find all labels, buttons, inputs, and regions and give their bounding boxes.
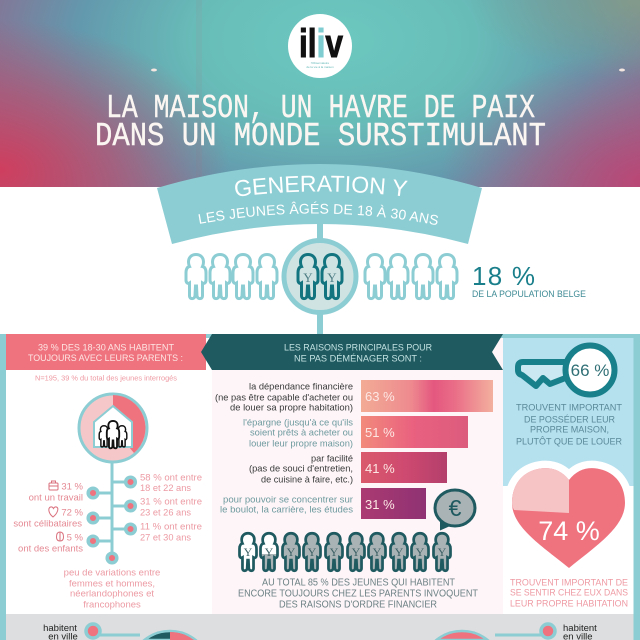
statistic: 18 %: DE LA POPULATION BELGE (472, 289, 586, 300)
people row: 85 %: Y (308, 545, 317, 559)
title (95, 90, 546, 155)
reason labels: soient prêts à acheter ou (250, 427, 353, 438)
age breakdown text: 23 et 26 ans (140, 508, 191, 518)
situation text with icons (13, 481, 84, 554)
situation text with icons: sont célibataires (13, 518, 82, 530)
people row: 85 %: Y (438, 545, 447, 559)
ribbon: Generation Y (157, 164, 482, 334)
bar chart: reasons: 31 % (365, 497, 395, 512)
reason labels: (pas de souci d'entretien, (249, 463, 353, 474)
people row: 85 %: Y (395, 545, 404, 559)
note: variations: peu de variations entre (64, 568, 160, 578)
heart chart 74 % (512, 468, 625, 568)
logo: iliv: l'Observatoire (311, 61, 330, 65)
text: 66 % caption: TROUVENT IMPORTANT (516, 402, 622, 413)
text: 66 % caption: PROPRE MAISON, (530, 424, 609, 435)
heading: pink: 39 % DES 18-30 ANS HABITENT (38, 342, 174, 354)
people row: 85 % (240, 533, 450, 571)
reason labels: la dépendance financière (249, 381, 353, 392)
icon: key 66 % (518, 346, 614, 394)
donut chart with house icon (79, 394, 147, 462)
bar chart: reasons: 63 % (365, 389, 395, 404)
header textured gradient banner (0, 0, 640, 187)
reason labels: (ne pas être capable d'acheter ou (215, 392, 353, 403)
reason labels: pour pouvoir se concentrer sur (223, 494, 353, 505)
note: variations: femmes et hommes, (69, 578, 155, 590)
icon: key 66 %: 66 % (571, 361, 609, 380)
note: variations: néerlandophones et (70, 588, 154, 600)
note: variations (64, 568, 160, 610)
reason labels: de louer sa propre habitation) (230, 402, 353, 413)
logo: iliv: iliv (299, 22, 344, 66)
logo: iliv (288, 14, 352, 78)
age breakdown text: 31 % ont entre (140, 496, 202, 508)
reason labels: le boulot, la carrière, les études (220, 504, 353, 515)
situation text with icons: ont des enfants (18, 544, 83, 554)
situation text with icons: ont un travail (29, 492, 83, 504)
logo: iliv: de la vie à la maison (306, 65, 334, 69)
people row: 85 %: Y (330, 545, 339, 559)
text: 74 % caption: SE SENTIR CHEZ EUX DANS (510, 587, 628, 598)
reason labels: de cuisine à faire, etc.) (261, 474, 353, 485)
text: 66 % caption (516, 402, 622, 447)
reason labels: louer leur propre maison) (249, 438, 353, 449)
conclusion text: AU TOTAL 85 % DES JEUNES QUI HABITENT (262, 578, 455, 588)
age breakdown text: 58 % ont entre (140, 472, 202, 484)
left pie with callout: habitent (43, 623, 77, 634)
ribbon: Generation Y: GENERATION Y (235, 176, 408, 196)
situation text with icons: 31 % (61, 482, 84, 492)
note: variations: francophones (83, 600, 141, 610)
situation text with icons: 72 % (61, 508, 84, 518)
right pie with callout: habitent (563, 623, 597, 634)
people row: 85 %: Y (244, 545, 253, 559)
title: DANS UN MONDE SURSTIMULANT (95, 118, 546, 155)
bar chart: reasons: 41 % (365, 461, 395, 476)
people row: 85 %: Y (287, 545, 296, 559)
people row: 85 %: Y (373, 545, 382, 559)
frame and panel backgrounds (0, 334, 640, 640)
reason labels (215, 381, 353, 515)
icon: euro speech bubble (435, 490, 475, 529)
ribbon: Generation Y: LES JEUNES ÂGÉS DE 18 À 30 ANS (198, 202, 438, 225)
conclusion text (238, 578, 478, 610)
statistic: 18 %: 18 % (472, 261, 535, 291)
left pie with callout (43, 623, 196, 640)
heart chart 74 %: 74 % (538, 516, 600, 546)
bar chart: reasons: 51 % (365, 425, 395, 440)
right pie with callout (436, 623, 597, 640)
text: 66 % caption: DE POSSÉDER LEUR (524, 414, 615, 425)
conclusion text: DES RAISONS D'ORDRE FINANCIER (279, 600, 437, 610)
people row: 85 %: Y (352, 545, 361, 559)
people row: 85 %: Y (265, 545, 274, 559)
conclusion text: ENCORE TOUJOURS CHEZ LES PARENTS INVOQUENT (238, 588, 478, 600)
situation text with icons: 5 % (67, 532, 84, 544)
text: 74 % caption: LEUR PROPRE HABITATION (510, 598, 628, 609)
statistic: 18 % (472, 261, 586, 300)
heading: pink (6, 334, 206, 370)
tree: profile of young people (88, 461, 135, 563)
heading: dark: LES RAISONS PRINCIPALES POUR (284, 342, 432, 354)
heading: pink: TOUJOURS AVEC LEURS PARENTS : (28, 353, 183, 364)
people row: population: Y (303, 270, 313, 285)
age breakdown text (140, 472, 202, 544)
note: sample size: N=195, 39 % du total des jeunes interrogés (35, 374, 177, 382)
people row: 85 %: Y (416, 545, 425, 559)
heading: dark (201, 334, 503, 370)
text: 74 % caption: TROUVENT IMPORTANT DE (510, 577, 628, 588)
text: 66 % caption: PLUTÔT QUE DE LOUER (516, 436, 622, 447)
reason labels: par facilité (311, 453, 353, 464)
reason labels: l'épargne (jusqu'à ce qu'ils (243, 417, 353, 428)
title: LA MAISON, UN HAVRE DE PAIX (106, 90, 535, 127)
age breakdown text: 11 % ont entre (140, 522, 202, 532)
heading: dark: NE PAS DÉMÉNAGER SONT : (294, 354, 422, 364)
age breakdown text: 18 et 22 ans (140, 483, 191, 494)
age breakdown text: 27 et 30 ans (140, 532, 191, 544)
text: 74 % caption (510, 577, 628, 609)
bar chart: reasons (361, 380, 493, 519)
people row: population: Y (327, 270, 337, 285)
people row: population (186, 240, 457, 312)
icon: euro speech bubble: € (449, 495, 462, 521)
